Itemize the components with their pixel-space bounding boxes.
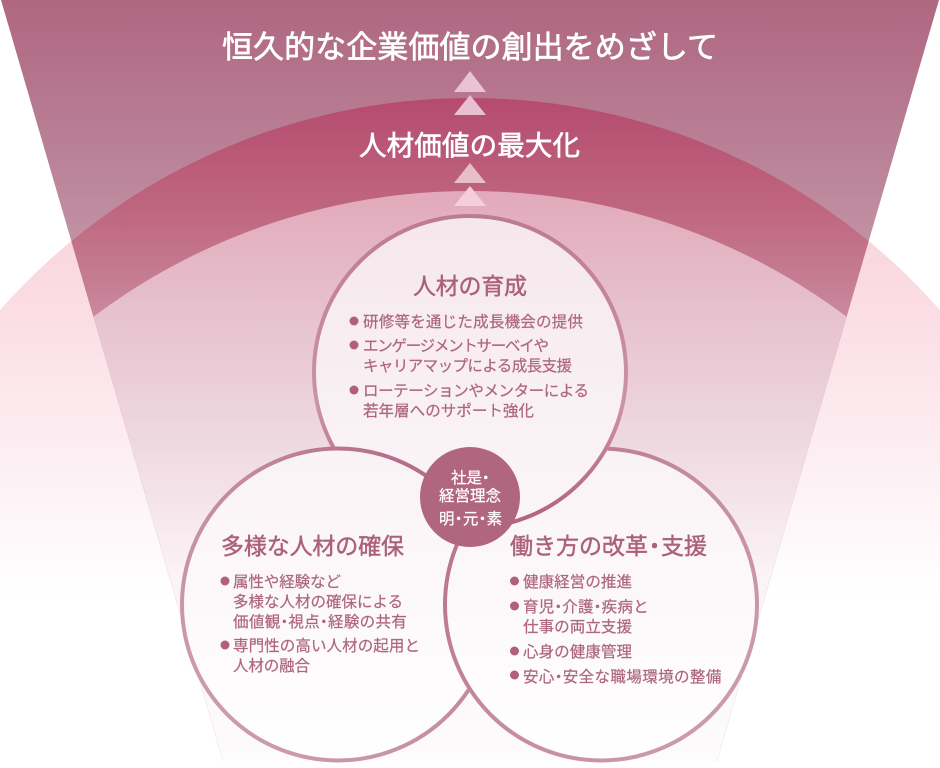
- inner arc: foundation glow: [94, 191, 846, 761]
- list: talent development items: [350, 313, 589, 420]
- center badge: corporate philosophy: [420, 447, 520, 547]
- list: diverse talent items: 価値観・視点・経験の共有: [233, 613, 407, 631]
- list: talent development items: キャリアマップによる成長支援: [363, 357, 572, 375]
- list: workstyle reform items: 安心・安全な職場環境の整備: [523, 668, 722, 686]
- center badge: corporate philosophy: 明・元・素: [439, 510, 503, 528]
- center badge: corporate philosophy: 経営理念: [439, 487, 501, 505]
- list: talent development items: 若年層へのサポート強化: [363, 402, 534, 420]
- panel: talent development: [350, 273, 589, 420]
- heading: diverse talent: 多様な人材の確保: [221, 533, 404, 559]
- center badge: corporate philosophy: 社是・: [451, 469, 494, 487]
- list: workstyle reform items: [510, 573, 722, 686]
- list: workstyle reform items: 仕事の両立支援: [523, 618, 632, 636]
- list: diverse talent items: 属性や経験など: [233, 573, 341, 591]
- heading: talent development: 人材の育成: [413, 273, 527, 299]
- panel: diverse talent: [220, 533, 420, 675]
- list: talent development items: エンゲージメントサーベイや: [363, 337, 549, 355]
- list: talent development items: ローテーションやメンターによる: [363, 382, 589, 400]
- subtitle: 人材価値の最大化: [359, 130, 580, 161]
- list: talent development items: 研修等を通じた成長機会の提供: [363, 313, 583, 331]
- circle outlines with interlocking overlap: [182, 216, 757, 760]
- panel: workstyle reform: [510, 533, 722, 686]
- list: diverse talent items: 専門性の高い人材の起用と: [233, 637, 420, 655]
- circle fills: [182, 216, 757, 760]
- list: workstyle reform items: 育児・介護・疾病と: [523, 598, 649, 616]
- heading: workstyle reform: 働き方の改革・支援: [510, 533, 707, 559]
- list: workstyle reform items: 健康経営の推進: [523, 573, 632, 591]
- list: workstyle reform items: 心身の健康管理: [523, 643, 632, 661]
- title: 恒久的な企業価値の創出をめざして: [222, 30, 718, 65]
- list: diverse talent items: 人材の融合: [233, 657, 310, 675]
- arrows: upper pair: [454, 71, 486, 115]
- list: diverse talent items: 多様な人材の確保による: [233, 593, 403, 611]
- list: diverse talent items: [220, 573, 420, 675]
- arrows: lower pair: [454, 163, 486, 206]
- band: human capital value arc: [71, 98, 869, 761]
